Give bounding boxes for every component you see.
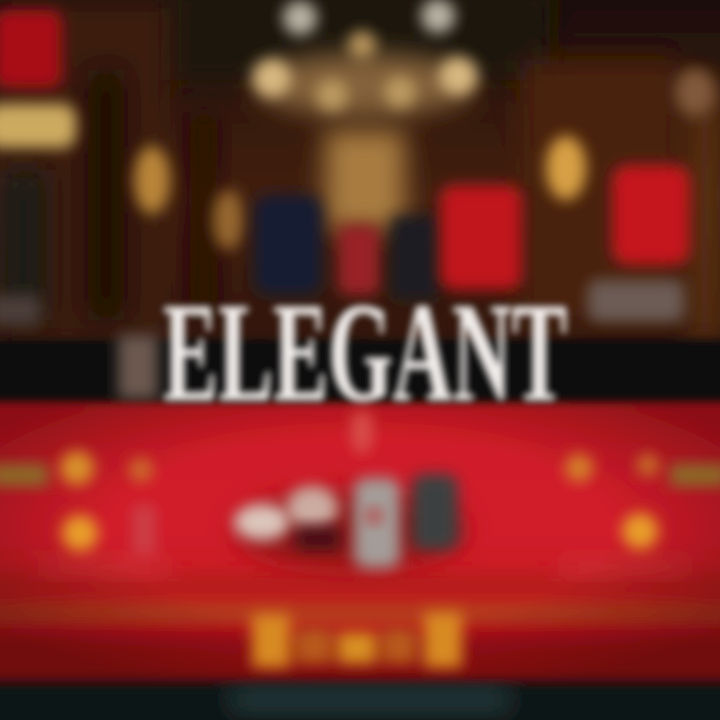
chandelier: [253, 0, 477, 117]
wall lights: [134, 68, 715, 250]
red table felt: [0, 404, 720, 684]
gold table markers: left: [0, 451, 156, 555]
dark table rail: [0, 335, 720, 399]
gold lettering: [252, 612, 462, 668]
poker chips and cards: [234, 474, 465, 568]
centre marker: [351, 410, 373, 454]
background: hall wall: [0, 0, 720, 410]
bottom dark band: [0, 682, 720, 720]
figures behind table: [0, 165, 690, 325]
lamp: top left: [0, 10, 76, 320]
gold table markers: right: [565, 454, 720, 549]
